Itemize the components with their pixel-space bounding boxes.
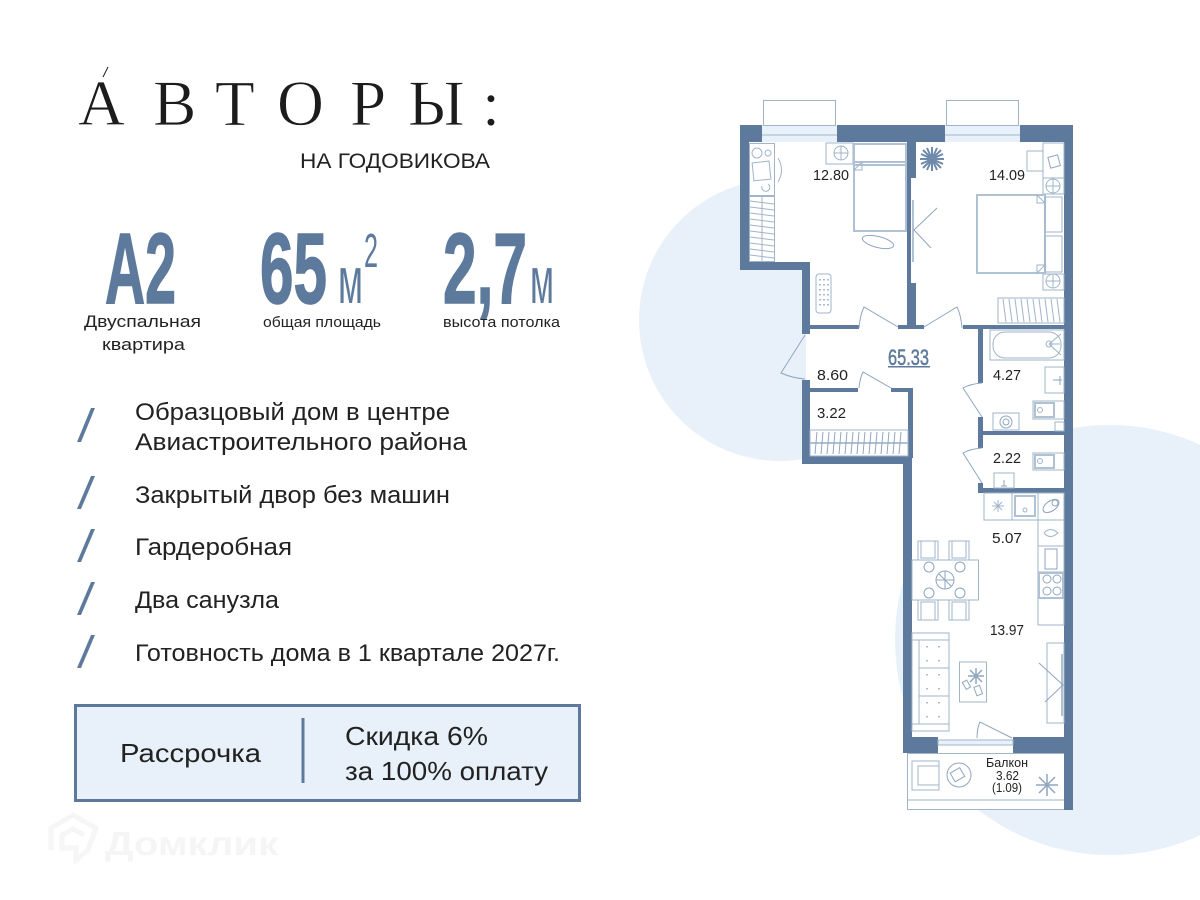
stat: total area: общая площадь: [263, 314, 381, 331]
bullet 5: [77, 635, 560, 668]
bullet 3: [77, 529, 292, 562]
stat: ceiling height: м: [530, 243, 554, 317]
room areas: 8.60: [817, 367, 848, 384]
bullet 1: Авиастроительного района: [135, 429, 468, 456]
room areas: (1.09): [992, 781, 1022, 795]
coffee table: [960, 662, 986, 702]
room areas: 4.27: [993, 367, 1021, 384]
room areas: Балкон: [986, 756, 1028, 770]
decorative circle right: [895, 425, 1200, 855]
room areas: 2.22: [993, 450, 1021, 467]
stat: apartment type: Двуспальная: [84, 312, 201, 331]
stat: apartment type: A2: [105, 213, 176, 325]
room areas: 14.09: [989, 167, 1025, 184]
bullet 4: [77, 582, 280, 615]
feature list: [77, 399, 560, 668]
bullet 3: Гардеробная: [135, 534, 292, 561]
floor plan: [740, 100, 1073, 810]
storage rack: [810, 430, 908, 456]
offer box: Скидка 6%: [345, 721, 488, 751]
bullet 1: [77, 399, 468, 456]
stat: ceiling height: 2,7: [443, 213, 527, 325]
total area label: 65.33: [888, 345, 929, 370]
stat: total area: 65: [260, 213, 327, 325]
offer box: Рассрочка: [120, 738, 262, 768]
wc furniture: [994, 453, 1064, 488]
subtitle: НА ГОДОВИКОВА: [300, 150, 490, 173]
bathroom furniture: [990, 330, 1064, 431]
stat: apartment type: [84, 213, 201, 354]
walls: [740, 125, 1073, 810]
watermark: Домклик: [105, 825, 279, 862]
offer box: [76, 706, 580, 800]
room areas: 5.07: [992, 530, 1022, 547]
stat: ceiling height: высота потолка: [443, 314, 561, 331]
room areas: 3.62: [996, 769, 1019, 783]
bullet 5: Готовность дома в 1 квартале 2027г.: [135, 640, 560, 667]
watermark: [51, 815, 279, 862]
apartment floor: [745, 130, 1068, 745]
doors: [781, 307, 1012, 738]
room areas: 12.80: [813, 167, 849, 184]
decorative circle left: [639, 179, 921, 461]
bedroom 2 furniture: [913, 143, 1064, 323]
room areas: 3.22: [817, 405, 846, 422]
room areas: [813, 167, 1028, 795]
balcony furniture: [912, 761, 1058, 796]
bullet 2: Закрытый двор без машин: [135, 482, 450, 509]
stat: total area: 2: [364, 225, 378, 278]
dining table: [912, 541, 978, 620]
balcony frame: [908, 754, 1064, 810]
sofa: [912, 633, 949, 731]
stat: total area: м: [338, 243, 363, 317]
offer box: за 100% оплату: [345, 756, 548, 786]
bullet 4: Два санузла: [135, 587, 280, 614]
bullet 2: [77, 476, 450, 509]
kitchen furniture: [984, 493, 1064, 625]
tv unit: [1039, 643, 1064, 723]
room areas: 13.97: [990, 622, 1024, 639]
stat: apartment type: квартира: [102, 335, 186, 354]
windows: [762, 100, 1020, 753]
bedroom 1 furniture: [750, 143, 906, 313]
bullet 1: Образцовый дом в центре: [135, 399, 450, 426]
title: АВТОРЫ:: [78, 68, 500, 140]
